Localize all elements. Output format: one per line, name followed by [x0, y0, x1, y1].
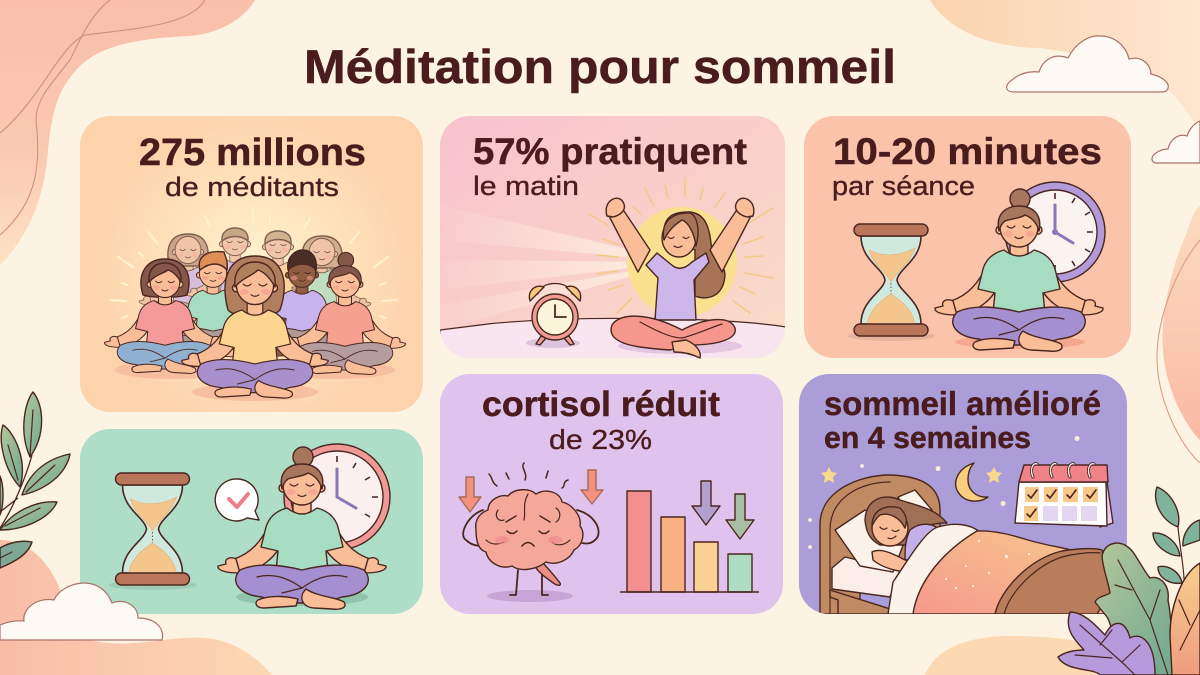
- subheading: le matin: le matin: [473, 171, 579, 201]
- meditator: woman in yellow, centre: [182, 256, 328, 398]
- foot: [672, 340, 700, 358]
- panel: 10-20 minutes par séance: [804, 116, 1131, 358]
- plant: left branch: [0, 392, 70, 568]
- raised arms: [608, 208, 752, 272]
- meditating woman in green: [935, 189, 1103, 351]
- light rays: [110, 208, 397, 318]
- heading: sommeil amélioré: sommeil amélioré: [824, 385, 1101, 422]
- headboard: [820, 475, 940, 614]
- sheet fold: [888, 524, 980, 614]
- heading: 275 millions: 275 millions: [139, 132, 366, 174]
- panel: cortisol réduit de 23%: [440, 374, 783, 614]
- decorative blob: bottom right: [925, 636, 1120, 675]
- panel: meditation with clock, green: [80, 429, 423, 614]
- ground shadows: [115, 361, 395, 401]
- panel: sommeil amélioré en 4 semaines: [799, 374, 1127, 614]
- purple leaf: [1058, 612, 1155, 675]
- cloud: bottom left: [0, 583, 163, 640]
- heading: 10-20 minutes: 10-20 minutes: [833, 131, 1102, 172]
- cloud: right edge: [1152, 121, 1200, 163]
- long hair: [664, 212, 725, 298]
- face: [872, 510, 908, 546]
- hourglass: [847, 224, 935, 341]
- sun rays and ground: [440, 205, 786, 360]
- hourglass: [108, 473, 196, 590]
- wall clock: [1005, 182, 1105, 282]
- blanket: [913, 531, 1110, 614]
- alarm clock: [526, 284, 581, 348]
- bar chart: decreasing cortisol: [620, 491, 759, 592]
- orange leaf: [1170, 563, 1200, 675]
- title: Méditation pour sommeil: [304, 40, 896, 93]
- stress arrows: [459, 470, 603, 512]
- arm: [871, 550, 908, 572]
- heading: cortisol réduit: cortisol réduit: [482, 385, 720, 424]
- middle row: boy in green: [158, 252, 268, 357]
- back pillow: [897, 489, 933, 510]
- wall clock: [284, 444, 390, 550]
- speech bubble with check mark: [215, 479, 259, 521]
- footboard: [995, 549, 1110, 614]
- decrease arrows: [692, 481, 754, 539]
- sun ray strokes: [589, 178, 773, 313]
- panel: 57% pratiquent le matin: [440, 116, 786, 360]
- panel: 275 millions de méditants: [80, 105, 423, 435]
- shirt: [905, 524, 940, 560]
- mattress: [832, 557, 900, 597]
- decorative blob: right side: [1157, 205, 1200, 463]
- front pillow: [835, 510, 905, 572]
- meditator: woman in salmon: [284, 252, 406, 374]
- stretching woman: [606, 198, 754, 358]
- meditating woman in green: [218, 447, 386, 609]
- glow behind group: [90, 105, 420, 435]
- plant: bottom right foliage: [1058, 487, 1200, 675]
- subheading: de 23%: de 23%: [549, 424, 652, 455]
- legs: [611, 316, 735, 350]
- bed frame: [829, 590, 888, 614]
- crescent moon: [956, 463, 988, 501]
- small branch: [1178, 527, 1184, 600]
- calendar with checks: [1015, 464, 1113, 527]
- subheading: de méditants: de méditants: [165, 172, 339, 202]
- decorative blob: bottom left: [0, 540, 272, 675]
- middle row: man in lilac: [247, 250, 357, 357]
- back row of faded meditators: [139, 228, 371, 328]
- face: [662, 219, 696, 257]
- green leaf: [1095, 543, 1174, 675]
- stressed brain character: [463, 463, 599, 602]
- heading: en 4 semaines: en 4 semaines: [824, 420, 1031, 455]
- hair: [865, 497, 947, 545]
- decorative blob: top right: [930, 0, 1200, 137]
- subheading: par séance: par séance: [832, 171, 975, 201]
- stars and sparkles: [808, 436, 1080, 549]
- bed with sleeping woman: [820, 475, 1110, 614]
- heading: 57% pratiquent: 57% pratiquent: [473, 131, 747, 172]
- cloud: top right: [1007, 36, 1168, 92]
- decorative blob: top left: [0, 0, 255, 265]
- shirt: [646, 253, 709, 320]
- meditator: woman in pink: [104, 259, 226, 373]
